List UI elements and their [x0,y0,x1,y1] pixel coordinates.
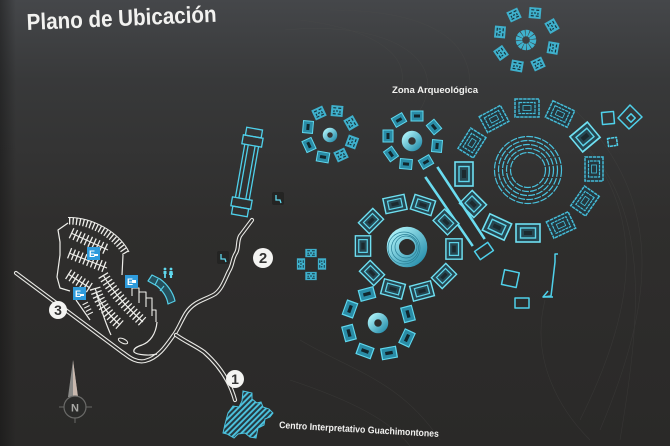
outlying structures [475,105,642,308]
number marker 2 [253,248,273,268]
sign E 3: E [75,289,81,299]
small cross structure [297,249,326,280]
gate building [230,127,264,217]
north arrow [59,360,92,423]
walls [426,168,484,245]
parking row 3 [68,274,90,288]
icon: wheelchair 2 [217,251,229,264]
parking row 1 [71,233,108,250]
number marker 2: 2 [259,250,267,267]
sign E 2: E [127,277,133,287]
circular complex: D [302,105,359,163]
circular complex: E [383,111,443,170]
parking area [57,217,157,355]
parking signs [73,247,138,300]
visitor center [223,391,273,438]
circular complex: A large [455,99,603,242]
parking stairs [128,284,156,322]
parking ticks: top arc [69,221,126,254]
parking row 2 [69,253,107,268]
icon: wheelchair 1 [272,192,284,205]
road network [16,220,252,400]
label: centro interpretativo: Centro Interpretativo Guachimontones [279,420,439,440]
number marker 3 [49,301,67,319]
number marker 1: 1 [231,371,239,387]
parking row 5 [95,288,120,325]
parking row 4 [103,275,143,322]
circular complex: B [355,194,462,301]
label: zona arqueológica: Zona Arqueológica [392,85,479,96]
north arrow: N [71,402,79,414]
circular complex: top [493,7,560,72]
number marker 3: 3 [54,302,62,318]
restroom building [148,275,175,304]
circular complex: C [342,287,415,360]
number marker 1 [226,370,244,388]
small island [118,337,128,345]
parking perimeter [57,223,157,355]
title: Plano de Ubicación [26,1,217,35]
icon: restrooms [163,268,173,278]
sign E 1: E [89,249,95,259]
